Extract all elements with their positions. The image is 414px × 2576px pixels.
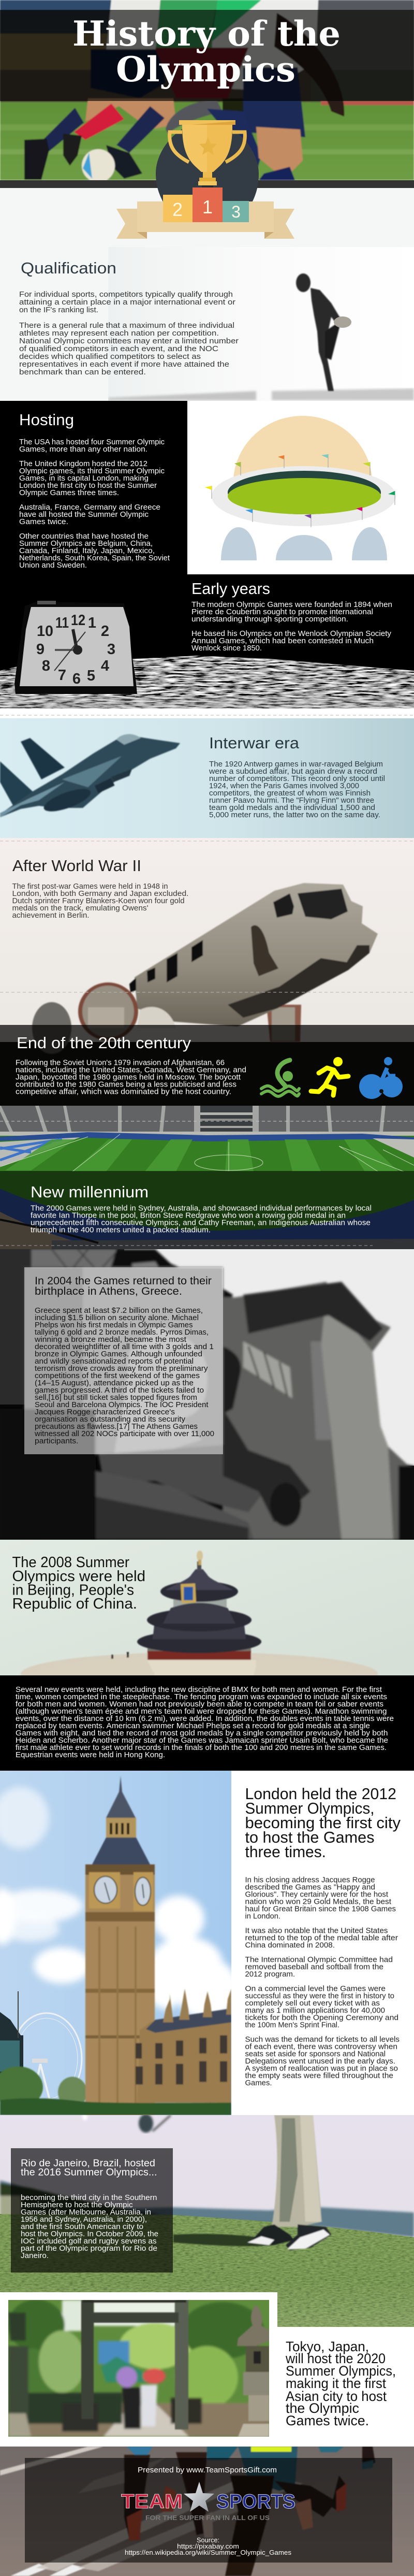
heading: rio: Rio de Janeiro, Brazil, hosted xyxy=(21,2158,155,2169)
text: rio body: IOC included golf and rugby sevens as xyxy=(21,2237,156,2246)
text: london body: On a commercial level the Games were xyxy=(245,1985,386,1993)
text: beijing body xyxy=(16,1686,394,1759)
heading: tokyo: Games twice. xyxy=(286,2413,369,2428)
text: athens body: games progressed. A third of the tickets failed to xyxy=(35,1386,204,1395)
text: hosting body: Other countries that have hosted the xyxy=(19,532,149,541)
text: rio body: Games (after Melbourne, Australia, in xyxy=(21,2208,151,2217)
text: interwar body: were a subdued affair, but again drew a record xyxy=(209,768,377,776)
text: athens body: decorated weightlifter of all time with 3 golds and 1 xyxy=(35,1343,214,1351)
photo: golfer on grass xyxy=(0,2114,414,2327)
podium 2 xyxy=(163,195,193,222)
text: interwar body: competitors, the greatest of whom was Finnish xyxy=(209,789,371,798)
text: beijing body: first male athlete ever to set world records in the finals of both the 100 and 200 metres in the same Games. xyxy=(16,1744,387,1752)
logo: team sports: FOR THE SUPER FAN IN ALL OF US xyxy=(145,2514,270,2522)
text: qualification body xyxy=(19,291,239,377)
text: london body: seats set aside for sponsors and National xyxy=(245,2050,386,2058)
text: beijing body: Several new events were held, including the new discipline of BMX for both men and women. For the first xyxy=(16,1686,382,1694)
panel: qualification xyxy=(0,247,414,401)
text: interwar body: number of competitors. This record only stood until xyxy=(209,775,385,783)
text: london body: The International Olympic Committee had xyxy=(245,1956,393,1964)
heading: beijing: in Beijing, People's xyxy=(12,1582,134,1598)
text: hosting body: Games twice. xyxy=(19,518,68,526)
photo: stretching athlete xyxy=(108,247,414,401)
text: athens body: winning a bronze medal, became the most xyxy=(34,1336,186,1344)
text: london body: in London. xyxy=(245,1912,280,1920)
text: new millennium body: favorite Ian Thorpe in the pool, Briton Steve Redgrave who won a rowing gold medal in an xyxy=(31,1212,346,1220)
heading: Athens: birthplace in Athens, Greece. xyxy=(35,1285,182,1297)
photo: fighter jet xyxy=(0,718,414,838)
text: rio body: Hemisphere to host the Olympic xyxy=(21,2201,133,2209)
text: london body: Glorious". They certainly were for the host xyxy=(245,1890,388,1899)
text: london body: A system of reallocation was put in place so xyxy=(245,2064,398,2073)
text: london body: It was also notable that the United States xyxy=(245,1927,388,1935)
dark bar xyxy=(0,180,414,188)
text: london body: many as 1 million applications for 40,000 xyxy=(245,2006,385,2015)
text: hosting body: Games, in its capital London, making xyxy=(19,474,149,483)
panel: footer xyxy=(0,2447,414,2576)
icon: clock: 8 xyxy=(42,658,50,674)
text: qualification body: National Olympic committees may enter a limited number xyxy=(19,337,239,345)
icon: clock: 6 xyxy=(72,671,81,687)
text: athens body: bronze in Olympic Games. Although unfounded xyxy=(35,1350,202,1358)
podium 1 xyxy=(193,187,223,222)
text: qualification body: of qualified competitors in each event, and the NOC xyxy=(19,345,218,353)
heading: New millennium: New millennium xyxy=(31,1183,149,1201)
icon: cyclist xyxy=(359,1057,403,1099)
text: london body: Delegations went unused in the early days. xyxy=(245,2057,395,2065)
text: london body: China dominated in 2008. xyxy=(245,1941,335,1949)
text: london body: Such was the demand for tickets to all levels xyxy=(245,2035,400,2044)
title: History of the xyxy=(72,13,341,54)
text: hosting body xyxy=(19,438,170,570)
logo: team sports xyxy=(121,2482,295,2522)
text: london body: removed baseball and softball from the xyxy=(245,1963,383,1971)
text: london body: the 100m Men's Sprint Final. xyxy=(245,2021,339,2029)
photo: wrecked aeroplane xyxy=(0,838,414,1109)
text: qualification body: benchmark than can be entered. xyxy=(19,368,146,377)
text: london body: described the Games as "Happy and xyxy=(245,1883,375,1891)
text: london body: completely sell out every ticket with as xyxy=(245,1999,380,2007)
text: athens body: (14–15 August), attendance picked up as the xyxy=(35,1379,194,1387)
text: qualification body: on the IF's ranking list. xyxy=(19,306,98,314)
text: beijing body: Games with eight, and tied the record of most gold medals by a single competitor previously held by both xyxy=(16,1729,388,1738)
text: athens body: and wildly sensationalized reports of potential xyxy=(35,1357,194,1366)
text: 20th century body xyxy=(16,1059,246,1096)
text: 20th century body: nations, including the United States, Canada, West Germany, and xyxy=(16,1066,246,1074)
text: hosting body: have all hosted the Summer Olympic xyxy=(19,511,149,519)
heading: tokyo: the Olympic xyxy=(286,2400,359,2416)
icon: clock: 10 xyxy=(37,623,53,640)
text: rio body: part of the Olympic program for Rio de xyxy=(21,2245,157,2253)
text: qualification body: There is a general rule that a maximum of three individual xyxy=(19,322,234,330)
icon: clock: 11 xyxy=(55,615,69,631)
photo: japanese shrine xyxy=(3,2299,269,2437)
text: sources: https://pixabay.com xyxy=(177,2542,239,2550)
icon: clock: 12 xyxy=(71,612,85,629)
text: london body: the empty seats were filled throughout the xyxy=(245,2072,393,2080)
text: rio body: becoming the third city in the Southern xyxy=(21,2194,157,2202)
text: rio body: and the first South American city to xyxy=(21,2223,143,2231)
heading: beijing: Republic of China. xyxy=(12,1596,137,1612)
icon: clock: 3 xyxy=(107,641,115,658)
photo: stadium xyxy=(0,1106,414,1249)
text: sources: Source: xyxy=(197,2536,219,2544)
text: athens body: precautions as flawless.[17] The Athens Games xyxy=(35,1423,198,1431)
heading: london: three times. xyxy=(245,1843,326,1861)
text: early years body: Annual Games, which had been contested in Much xyxy=(191,637,374,645)
panel: hosting xyxy=(0,401,414,574)
text: hosting body: The USA has hosted four Summer Olympic xyxy=(19,438,165,446)
heading: tokyo: will host the 2020 xyxy=(285,2351,386,2366)
text: after ww2 body: achievement in Berlin. xyxy=(12,911,89,920)
black text panel xyxy=(0,1675,414,1771)
heading: End of the 20th century: End of the 20th century xyxy=(17,1034,191,1052)
heading: tokyo: Tokyo, Japan, xyxy=(286,2339,369,2354)
text: rio body: 1956 and Sydney, Australia, in 2000), xyxy=(21,2216,147,2224)
heading: Interwar era: Interwar era xyxy=(209,734,300,752)
text: qualification body: For individual sports, competitors typically qualify through xyxy=(19,291,233,299)
text: rio body: host the Olympics. In October 2009, the xyxy=(21,2230,158,2238)
text: london body: haul for Great Britain since the 1908 Games xyxy=(245,1905,396,1913)
text: new millennium body: unprecedented fifth consecutive Olympics, and Cathy Freeman, an Indigenous Australian whose xyxy=(31,1219,371,1227)
text: hosting body: London the first city to host the Summer xyxy=(19,482,157,490)
text: early years body: understanding through sporting competition. xyxy=(191,615,348,624)
text: after ww2 body xyxy=(12,882,188,920)
heading: tokyo xyxy=(285,2339,396,2428)
heading: london: to host the Games xyxy=(245,1828,375,1846)
icon: clock: 1 xyxy=(88,615,96,631)
text: qualification body: representatives in each event if more have attained the xyxy=(19,360,229,369)
icon: clock: 2 xyxy=(101,623,109,640)
text: qualification body: attaining a certain place in a major international event or xyxy=(19,298,235,307)
icon: runner xyxy=(311,1057,348,1095)
text: new millennium body: The 2000 Games were held in Sydney, Australia, and showcased individual performances by local xyxy=(31,1205,372,1213)
panel: hero header xyxy=(0,0,414,188)
heading: Athens: In 2004 the Games returned to their xyxy=(35,1275,212,1287)
text: early years body: He based his Olympics on the Wenlock Olympian Society xyxy=(191,630,392,638)
text: interwar body xyxy=(209,760,385,819)
panel: early years xyxy=(0,574,414,708)
heading: Qualification: Qualification xyxy=(21,259,116,277)
icon: clock: 4 xyxy=(101,658,109,674)
text: hosting body: Olympic Games three times. xyxy=(19,489,119,497)
text: beijing body: events, over the distance of 10 km (6.2 mi), were added. In addition, the doubles events in table tennis were xyxy=(16,1715,394,1723)
text: early years body: The modern Olympic Games were founded in 1894 when xyxy=(191,601,392,609)
text: beijing body: time, women competed in the steeplechase. The fencing program was expanded to include all six events xyxy=(16,1693,387,1701)
text: presented by: Presented by www.TeamSportsGift.com xyxy=(138,2466,277,2474)
heading: beijing xyxy=(12,1554,145,1612)
text: after ww2 body: London, with both Germany and Japan excluded. xyxy=(12,890,188,898)
panel: london 2012 xyxy=(0,1771,414,2116)
heading: tokyo: Asian city to host xyxy=(286,2389,387,2404)
heading: Athens xyxy=(35,1275,212,1297)
text: new millennium body: triumph in the 400 meters united a packed stadium. xyxy=(31,1226,211,1235)
text: qualification body: decides which qualified competitors to select as xyxy=(19,353,201,361)
text band xyxy=(0,1171,414,1249)
photo: greek statue xyxy=(0,1249,414,1540)
text: london body: Games. xyxy=(245,2079,272,2087)
text: beijing body: (although women's team épée and men's team foil were dropped for these Games). Marathon swimming xyxy=(16,1707,387,1716)
heading: Early years: Early years xyxy=(191,580,270,598)
photo: temple of heaven xyxy=(0,1540,414,1675)
photo: alarm clock on sand xyxy=(0,601,414,708)
text: hosting body: Games, more than any other nation. xyxy=(19,445,147,454)
heading: After World War II: After World War II xyxy=(12,857,141,875)
text: rio body: Janeiro. xyxy=(21,2252,49,2260)
panel: beijing 2008 xyxy=(0,1540,414,1771)
text: early years body: Wenlock since 1850. xyxy=(191,644,262,653)
title band xyxy=(0,10,414,101)
heading: london: Summer Olympics, xyxy=(245,1799,375,1817)
text: beijing body: replaced by team events. American swimmer Michael Phelps set a record for gold medals at a single xyxy=(16,1722,370,1730)
text: beijing body: for both men and women. Women had not previously been able to compete in team foil or saber events xyxy=(16,1700,383,1709)
text: athens body: Seoul and Barcelona Olympics. The IOC President xyxy=(35,1401,209,1409)
heading: rio: the 2016 Summer Olympics... xyxy=(21,2167,157,2178)
text: hosting body: Australia, France, Germany and Greece xyxy=(19,503,160,512)
heading: beijing: Olympics were held xyxy=(12,1568,145,1585)
text: new millennium body xyxy=(31,1205,372,1235)
text: early years body: Pierre de Coubertin sought to promote international xyxy=(191,608,373,616)
text: interwar body: runner Paavo Nurmi. The "Flying Finn" won three xyxy=(209,797,374,805)
text: athens body: organisation as outstanding and its security xyxy=(35,1415,186,1424)
text: athens body: participants. xyxy=(35,1437,79,1445)
text: athens body: Phelps won his first medals in Olympic Games xyxy=(35,1321,193,1329)
heading: Hosting: Hosting xyxy=(19,411,74,429)
text: hosting body: Canada, Finland, Italy, Japan, Mexico, xyxy=(19,547,155,555)
panel: new millennium xyxy=(0,1106,414,1249)
text: rio body xyxy=(21,2194,158,2260)
text: 20th century body: competitive affair, which was dominated by the host country. xyxy=(16,1088,231,1096)
text: athens body: terrorism drove crowds away from the preliminary xyxy=(35,1365,208,1373)
text: beijing body: Heiden and Scherbo. Another major star of the Games was Jamaican sprinter Usain Bolt, who became the xyxy=(16,1736,388,1745)
text: athens body: competitions of the first weekend of the games xyxy=(35,1372,200,1380)
text: hosting body: Netherlands, South Korea, Spain, the Soviet xyxy=(19,554,170,562)
london eye xyxy=(19,2013,83,2100)
panel: interwar era xyxy=(0,718,414,838)
photo: big ben xyxy=(0,1771,238,2116)
text: hosting body: Summer Olympics are Belgium, China, xyxy=(19,540,153,548)
text: interwar body: 5,000 meter runs, the latter two on the same day. xyxy=(209,811,380,819)
text: interwar body: team gold medals and the individual 1,500 and xyxy=(209,804,375,812)
icon: trophy on podium xyxy=(116,120,294,239)
panel: athens 2004 xyxy=(0,1249,414,1540)
icon: clock: 7 xyxy=(58,667,66,684)
text: london body: of each event, there was controversy when xyxy=(245,2043,397,2051)
logo: team sports: SPORTS xyxy=(216,2491,295,2513)
text: hosting body: The United Kingdom hosted the 2012 xyxy=(19,460,147,468)
icon: swimmer xyxy=(261,1060,299,1096)
panel: end of the 20th century xyxy=(0,1025,414,1106)
text: athens body xyxy=(34,1307,214,1445)
text: interwar body: 1924, when the Paris Games involved 3,000 xyxy=(209,782,359,790)
text: london body: 2012 program. xyxy=(245,1970,295,1978)
text: early years body xyxy=(191,601,392,653)
icon: clock: 9 xyxy=(36,641,45,658)
heading: tokyo: Summer Olympics, xyxy=(286,2363,396,2379)
text: london body: successful as they were the first in history to xyxy=(245,1992,394,2000)
heading: london xyxy=(245,1785,401,1861)
panel: rio 2016 xyxy=(0,2114,414,2327)
podium 2: 2 xyxy=(172,199,183,220)
text: beijing body: Equestrian events were held in Hong Kong. xyxy=(16,1751,165,1759)
text: after ww2 body: Dutch sprinter Fanny Blankers-Koen won four gold xyxy=(12,897,184,905)
logo: team sports: TEAM xyxy=(121,2491,183,2513)
text: sources: https://en.wikipedia.org/wiki/Summer_Olympic_Games xyxy=(125,2549,292,2556)
icon: clock: 5 xyxy=(87,668,95,684)
callout box: rio text xyxy=(11,2148,173,2273)
text: after ww2 body: medals on the track, emulating Owens' xyxy=(12,904,149,913)
text: london body: tickets for both the Opening Ceremony and xyxy=(245,2014,398,2022)
panel: stadium illustration xyxy=(187,401,414,574)
heading: london: London held the 2012 xyxy=(245,1785,396,1803)
podium 1: 1 xyxy=(202,196,213,218)
text: athens body: sell,[16] but still ticket sales topped figures from xyxy=(35,1394,197,1402)
photo: runners on road xyxy=(0,2447,414,2576)
icon: clock xyxy=(14,601,137,694)
text: after ww2 body: The first post-war Games were held in 1948 in xyxy=(12,882,168,891)
text: athens body: Jacques Rogge characterized Greece's xyxy=(35,1408,175,1416)
text: london body: In his closing address Jacques Rogge xyxy=(245,1876,375,1884)
heading: beijing: The 2008 Summer xyxy=(12,1554,129,1571)
heading: tokyo: making it the first xyxy=(286,2376,386,2391)
text: london body xyxy=(245,1876,400,2087)
panel: trophy strip background xyxy=(0,188,414,247)
title: Olympics xyxy=(116,49,295,90)
text: hosting body: Olympic games, its third Summer Olympic xyxy=(19,467,165,475)
text: athens body: tallying 6 gold and 2 bronze medals. Pyrros Dimas, xyxy=(35,1328,209,1337)
text: 20th century body: contributed to the 1980 Games being a less publicised and less xyxy=(16,1080,236,1089)
text: london body: nation who won 29 Gold Medals, the best xyxy=(245,1898,391,1906)
text: interwar body: The 1920 Antwerp games in war-ravaged Belgium xyxy=(209,760,383,769)
podium 3 xyxy=(223,201,249,222)
heading: london: becoming the first city xyxy=(245,1814,401,1832)
title xyxy=(72,13,341,90)
text: hosting body: Union and Sweden. xyxy=(19,561,87,570)
panel: london text xyxy=(231,1771,414,2115)
panel: after world war II xyxy=(0,838,414,1109)
callout box: athens text xyxy=(24,1267,223,1454)
heading: rio xyxy=(21,2158,157,2178)
hero photo: football players xyxy=(0,0,414,182)
text: london body: returned to the top of the medal table after xyxy=(245,1934,398,1942)
panel: tokyo 2020 xyxy=(0,2292,395,2437)
text: athens body: Greece spent at least $7.2 billion on the Games, xyxy=(35,1307,203,1315)
text: 20th century body: Japan, boycotted the 1980 games held in Moscow. The boycott xyxy=(16,1073,241,1081)
footer box xyxy=(25,2458,392,2563)
text: athens body: including $1.5 billion on security alone. Michael xyxy=(35,1314,199,1322)
text: 20th century body: Following the Soviet Union's 1979 invasion of Afghanistan, 66 xyxy=(16,1059,225,1067)
podium 3: 3 xyxy=(231,202,241,221)
text: sources xyxy=(125,2536,292,2556)
text: qualification body: athletes may represent each nation per competition. xyxy=(19,329,219,338)
text: athens body: witnessed all 202 NOCs participate with over 11,000 xyxy=(34,1430,214,1438)
